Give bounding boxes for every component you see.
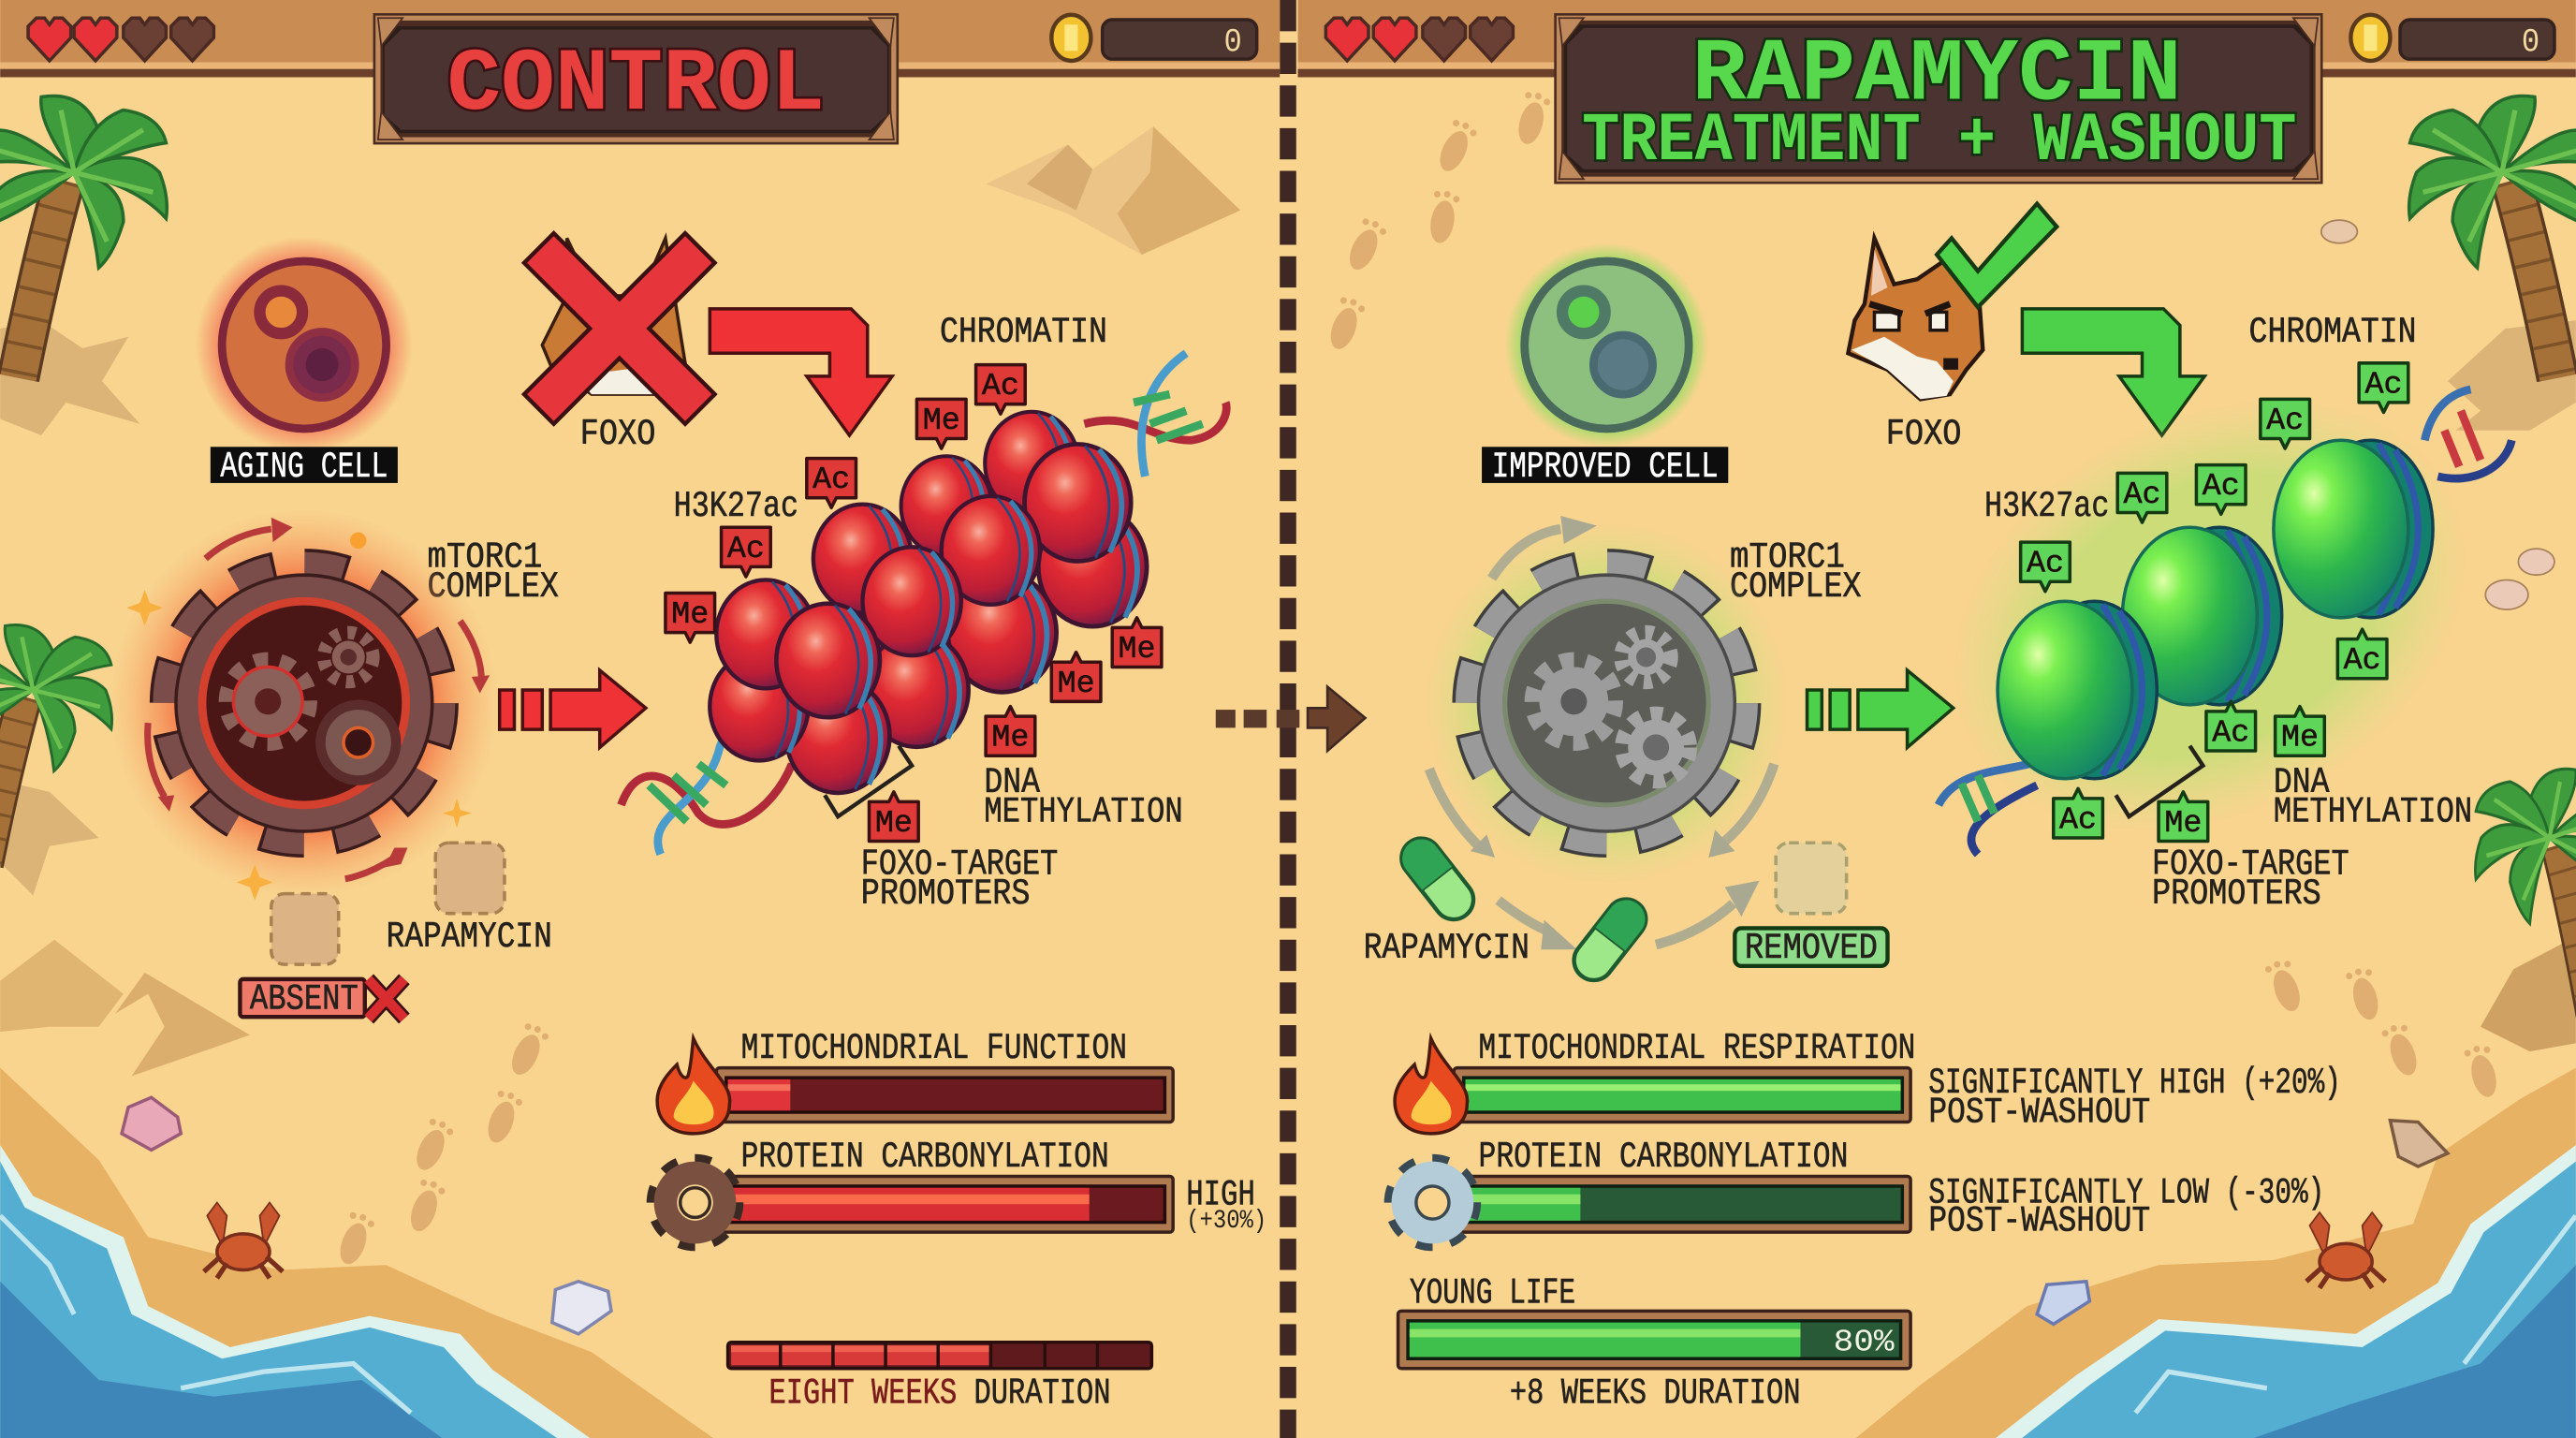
title: control <box>373 13 899 144</box>
label: mTORC1 complex <box>427 536 559 608</box>
label: +8 weeks duration: +8 WEEKS DURATION <box>1510 1373 1801 1415</box>
bracket: FOXO-target promoters <box>2115 746 2203 816</box>
icon: aging cell <box>196 237 413 453</box>
label: chromatin: CHROMATIN <box>2249 312 2417 353</box>
tags: histone marks: Ac <box>2266 404 2304 439</box>
label: high +30% <box>1186 1174 1266 1236</box>
label: FOXO-target promoters <box>861 844 1058 915</box>
tags: histone marks <box>2021 363 2408 842</box>
tags: histone marks: Me <box>875 806 913 842</box>
label: mTORC1 complex <box>1730 536 1861 608</box>
tags: histone marks: Ac <box>2124 477 2161 513</box>
label: H3K27ac: H3K27ac <box>1984 486 2109 527</box>
icon: flame <box>657 1038 730 1134</box>
stat bar: mitochondrial respiration <box>1454 1028 1915 1123</box>
duration bar: eight weeks: EIGHT WEEKS DURATION <box>768 1373 1110 1415</box>
stat bar: mitochondrial function: MITOCHONDRIAL FUNCTION <box>741 1028 1127 1069</box>
icon: rapamycin pills <box>1394 830 1654 988</box>
result text: significantly low: SIGNIFICANTLY LOW (-30%) <box>1928 1173 2324 1214</box>
cycle arrows: around gear <box>1429 516 1774 949</box>
center dashed divider with arrow <box>1216 0 1365 1438</box>
result text: significantly high: SIGNIFICANTLY HIGH (+20%) <box>1928 1063 2341 1104</box>
icon: flame <box>1395 1038 1468 1134</box>
tags: histone marks: Me <box>1119 632 1156 668</box>
stat bar: mitochondrial function <box>716 1028 1173 1123</box>
duration bar: eight weeks <box>728 1343 1151 1415</box>
label: high +30%: (+30%) <box>1186 1207 1266 1236</box>
label: DNA methylation <box>2274 762 2472 832</box>
label: DNA methylation: DNA <box>2274 762 2330 803</box>
label: FOXO-target promoters: FOXO-TARGET <box>861 844 1058 886</box>
chart: condensed chromatin <box>622 353 1226 855</box>
tags: histone marks <box>666 365 1162 842</box>
tags: histone marks: Me <box>2164 806 2202 842</box>
label: mTORC1 complex: mTORC1 <box>427 536 542 578</box>
title: control: CONTROL <box>447 36 825 136</box>
label: DNA methylation: DNA <box>984 762 1041 803</box>
label: high +30%: HIGH <box>1186 1174 1255 1215</box>
result text: significantly low: POST-WASHOUT <box>1928 1200 2150 1241</box>
stat bar: protein carbonylation: PROTEIN CARBONYLATION <box>741 1137 1109 1178</box>
tags: histone marks: Me <box>1058 667 1095 702</box>
tags: histone marks: Me <box>923 404 960 439</box>
tags: histone marks: Ac <box>727 532 765 567</box>
label: FOXO-target promoters: FOXO-TARGET <box>2152 844 2349 886</box>
title: rapamycin treatment + washout: TREATMENT + WASHOUT <box>1582 103 2296 181</box>
label: FOXO: FOXO <box>1886 414 1961 455</box>
label: DNA methylation <box>984 762 1183 832</box>
tags: histone marks: Ac <box>2344 643 2381 679</box>
icon: rusty gear <box>655 1163 735 1242</box>
label: FOXO-target promoters <box>2152 844 2349 915</box>
label: mTORC1 complex: COMPLEX <box>1730 566 1861 608</box>
label: rapamycin: RAPAMYCIN <box>387 917 552 958</box>
icon: crossed out FOXO fox <box>542 238 685 394</box>
tags: histone marks: Ac <box>2364 367 2402 403</box>
icon: clean gear <box>1393 1163 1472 1242</box>
icon: improved cell <box>1505 243 1708 447</box>
badge: removed: REMOVED <box>1745 928 1878 969</box>
result text: significantly low <box>1928 1173 2324 1241</box>
tags: histone marks: Ac <box>982 369 1019 404</box>
title: rapamycin treatment + washout: RAPAMYCIN <box>1692 25 2182 125</box>
label: FOXO-target promoters: PROMOTERS <box>2152 873 2321 915</box>
panel: rapamycin treatment + washout <box>1298 0 2576 1415</box>
tags: histone marks: Me <box>991 721 1029 756</box>
ghost slots: rapamycin absent <box>271 843 505 964</box>
icon: FOXO fox with check <box>1848 204 2056 399</box>
label: mTORC1 complex: COMPLEX <box>427 566 559 608</box>
label: mTORC1 complex: mTORC1 <box>1730 536 1845 578</box>
arrow: FOXO to chromatin <box>710 309 892 435</box>
label: H3K27ac: H3K27ac <box>674 486 798 527</box>
top bar: control <box>0 0 1280 77</box>
chart: open chromatin <box>1878 315 2541 917</box>
tags: histone marks: Ac <box>2212 715 2249 751</box>
arrow: mTORC1 to chromatin <box>1808 670 1954 747</box>
top bar: control: 0 <box>1224 23 1242 61</box>
icon: inhibited mTORC1 gear <box>1426 522 1787 884</box>
icon: active mTORC1 gear <box>110 509 498 901</box>
tags: histone marks: Ac <box>2203 469 2240 505</box>
life bar: young life 80%: YOUNG LIFE <box>1410 1273 1575 1314</box>
life bar: young life 80%: 80% <box>1834 1325 1895 1360</box>
stat bar: mitochondrial respiration: MITOCHONDRIAL RESPIRATION <box>1479 1028 1915 1069</box>
bracket: FOXO-target promoters <box>825 746 912 816</box>
label: improved cell: IMPROVED CELL <box>1492 447 1719 488</box>
scenery: right palm trees, shells, crab and footprints <box>1325 90 2576 1324</box>
ghost slot: removed pill <box>1776 843 1847 914</box>
stat bar: protein carbonylation: PROTEIN CARBONYLATION <box>1479 1137 1848 1178</box>
top bar: rapamycin: 0 <box>2522 23 2539 61</box>
tags: histone marks: Ac <box>812 462 850 498</box>
result text: significantly high <box>1928 1063 2341 1134</box>
label: aging cell: AGING CELL <box>220 447 388 488</box>
stat bar: protein carbonylation <box>1454 1137 1910 1232</box>
label: FOXO-target promoters: PROMOTERS <box>861 873 1030 915</box>
scenery: left palm trees, dunes, shells, crabs and footprints <box>0 95 1240 1334</box>
panel: control <box>0 0 1280 1415</box>
top bar: rapamycin <box>1298 0 2576 77</box>
title: rapamycin treatment + washout <box>1554 13 2323 184</box>
label: chromatin: CHROMATIN <box>940 312 1107 353</box>
label: rapamycin: RAPAMYCIN <box>1364 928 1530 969</box>
arrow: mTORC1 to chromatin <box>500 670 646 747</box>
tags: histone marks: Me <box>2281 721 2319 756</box>
label: DNA methylation: METHYLATION <box>2274 791 2472 832</box>
result text: significantly high: POST-WASHOUT <box>1928 1093 2150 1134</box>
life bar: young life 80% <box>1398 1273 1910 1369</box>
stat bar: protein carbonylation <box>716 1137 1173 1232</box>
label: FOXO: FOXO <box>580 414 655 455</box>
arrow: FOXO to chromatin <box>2022 309 2204 435</box>
badge: absent: ABSENT <box>250 978 359 1020</box>
tags: histone marks: Ac <box>2059 802 2097 838</box>
tags: histone marks: Me <box>671 597 709 633</box>
label: DNA methylation: METHYLATION <box>984 791 1183 832</box>
tags: histone marks: Ac <box>2027 547 2064 582</box>
